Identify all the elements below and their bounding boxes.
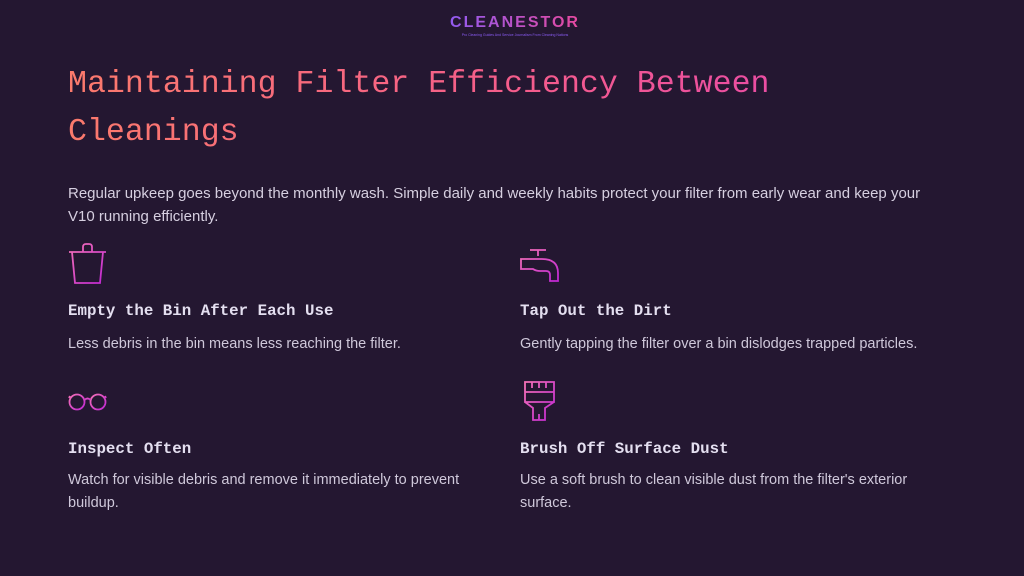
logo: CLEANESTOR (450, 14, 580, 31)
description: Gently tapping the filter over a bin dislodges trapped particles. (520, 336, 917, 352)
heading: Empty the Bin After Each Use (68, 302, 333, 320)
description: Use a soft brush to clean visible dust from the filter's exterior surface. (520, 472, 907, 511)
heading: Inspect Often (68, 440, 191, 458)
logo: Pro Cleaning Guides And Service Journalism From Cleaning Nations (462, 33, 568, 37)
item: brush (520, 381, 907, 511)
icon: bucket (69, 243, 106, 284)
item: inspect (68, 394, 460, 511)
heading: Tap Out the Dirt (520, 302, 672, 320)
heading: Brush Off Surface Dust (520, 440, 729, 458)
item: empty bin (68, 243, 401, 352)
icon: paint brush (524, 381, 555, 421)
item: tap out (520, 249, 917, 352)
icon: glasses (68, 394, 107, 410)
description: Watch for visible debris and remove it immediately to prevent buildup. (68, 472, 459, 511)
description: Less debris in the bin means less reaching the filter. (68, 336, 401, 352)
intro text: Regular upkeep goes beyond the monthly wash. Simple daily and weekly habits protect your filter from early wear and keep your V10 running efficiently. (68, 185, 920, 225)
title: Maintaining Filter Efficiency Between Cleanings (68, 67, 770, 150)
icon: faucet (520, 249, 559, 282)
